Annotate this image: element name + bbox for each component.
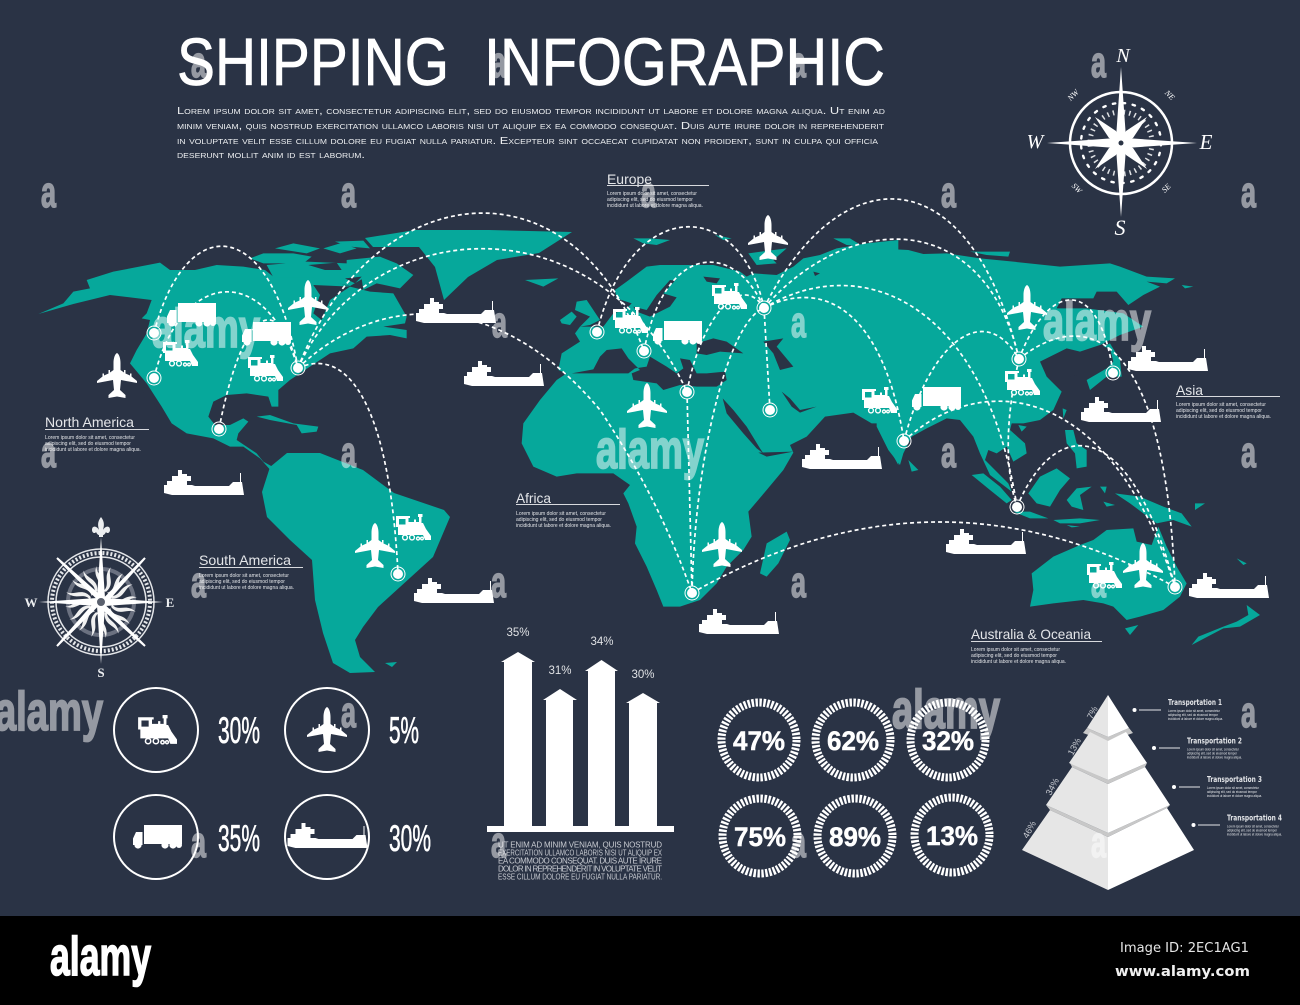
dial: 89%: 89% [829, 822, 881, 852]
compass: rose bottom left: S [97, 665, 105, 680]
watermarks: a [1241, 428, 1256, 477]
title: INFOGRAPHIC [484, 25, 885, 100]
label: Asia [1176, 382, 1280, 420]
label: South America: Lorem ipsum dolor sit amet, consectetur [199, 573, 289, 579]
bar chart: arrows: 35% [506, 627, 530, 639]
compass: top right [1027, 45, 1213, 240]
footer band [0, 916, 1300, 1005]
watermarks: a [791, 38, 806, 87]
pyramid legend: Transportation 1: incididunt ut labore et dolore magna aliqua. [1168, 717, 1223, 721]
pyramid legend: Transportation 3: Transportation 3 [1207, 775, 1262, 784]
watermarks: a [791, 818, 806, 867]
watermarks: alamy [596, 418, 704, 480]
bar chart caption: EA COMMODO CONSEQUAT. DUIS AUTE IRURE [498, 856, 662, 866]
label: Europe: Lorem ipsum dolor sit amet, consectetur [607, 191, 697, 197]
icons: trucks [167, 303, 961, 411]
compass: top right: SW [1070, 181, 1085, 196]
pyramid legend: Transportation 4: incididunt ut labore et dolore magna aliqua. [1227, 832, 1282, 836]
pyramid chart: 34% [1044, 776, 1061, 797]
label: Africa: Lorem ipsum dolor sit amet, consectetur [516, 511, 606, 517]
stat: train share: 30% [218, 710, 260, 751]
label: Europe: adipiscing elit, sed do eiusmod tempor [607, 197, 693, 203]
label: Australia and Oceania: incididunt ut labore et dolore magna aliqua. [971, 659, 1066, 665]
compass: top right: NE [1162, 88, 1177, 102]
intro paragraph: Lorem ipsum dolor sit amet, consectetur adipiscing elit, sed do eiusmod tempor incididunt ut labore et dolore magna aliqua. Ut enim ad [177, 105, 885, 117]
label: Asia: adipiscing elit, sed do eiusmod tempor [1176, 408, 1262, 414]
label: North America: Lorem ipsum dolor sit amet, consectetur [45, 435, 135, 441]
watermarks: a [341, 688, 356, 737]
intro paragraph: minim veniam, quis nostrud exercitation ullamco laboris nisi ut aliquip ex ea commodo consequat. Duis aute irure dolor in reprehenderit [177, 120, 885, 132]
label: Australia and Oceania [971, 626, 1102, 665]
pyramid legend: Transportation 2: Transportation 2 [1187, 736, 1242, 746]
watermarks: a [341, 168, 356, 217]
label: North America: adipiscing elit, sed do eiusmod tempor [45, 441, 131, 447]
watermarks: a [1091, 818, 1106, 867]
watermarks: a [491, 818, 506, 867]
icons: ships [164, 298, 1269, 634]
pyramid legend: Transportation 4 [1192, 814, 1282, 836]
icons: planes [97, 215, 1163, 588]
dial: 32%: 32% [922, 726, 974, 756]
bar chart caption: ESSE CILLUM DOLORE EU FUGIAT NULLA PARIATUR. [498, 872, 662, 882]
watermarks: alamy [152, 297, 260, 359]
bar chart caption [498, 840, 663, 882]
route hubs [147, 301, 1182, 600]
pyramid legend: Transportation 1 [1132, 698, 1223, 721]
bar chart: arrows [487, 627, 674, 832]
shipping routes [154, 199, 1175, 593]
compass: top right: E [1199, 130, 1213, 154]
dial: 75% [722, 798, 798, 874]
pyramid legend: Transportation 3: adipiscing elit, sed do eiusmod tempor [1207, 790, 1258, 794]
label: South America: adipiscing elit, sed do eiusmod tempor [199, 579, 285, 585]
pyramid legend: Transportation 3: incididunt ut labore et dolore magna aliqua. [1207, 794, 1262, 798]
compass: rose bottom left: W [24, 595, 38, 610]
label: Africa: adipiscing elit, sed do eiusmod tempor [516, 517, 602, 523]
watermarks: a [491, 38, 506, 87]
label: Australia and Oceania: adipiscing elit, sed do eiusmod tempor [971, 653, 1057, 659]
bar chart: arrows: 30% [631, 669, 655, 681]
label: North America [45, 414, 149, 453]
pyramid legend: Transportation 2: incididunt ut labore et dolore magna aliqua. [1187, 756, 1242, 760]
title: SHIPPING [177, 25, 449, 100]
pyramid legend: Transportation 4: Lorem ipsum dolor sit amet, consectetur [1227, 824, 1280, 828]
compass: top right: SE [1160, 182, 1173, 195]
icon: fleur-de-lis [92, 517, 110, 537]
watermarks: a [191, 818, 206, 867]
label: Australia and Oceania: Australia & Oceania [971, 626, 1091, 642]
dial: 75%: 75% [734, 822, 786, 852]
compass: top right: NW [1065, 87, 1082, 103]
watermarks: alamy [1043, 290, 1151, 352]
watermarks: a [941, 168, 956, 217]
stat: truck share: 35% [218, 818, 260, 859]
compass: rose bottom left: E [166, 595, 174, 610]
label: North America: incididunt ut labore et dolore magna aliqua. [45, 447, 141, 453]
stat: ship share: 30% [389, 818, 431, 859]
label: Asia: Asia [1176, 382, 1203, 398]
footer logo: alamy [50, 925, 151, 987]
stat: plane share [285, 688, 419, 772]
icons: trains [163, 283, 1122, 588]
North America [38, 241, 413, 473]
watermarks: a [341, 428, 356, 477]
dial: 47%: 47% [733, 726, 785, 756]
Europe, Africa and West Asia [522, 235, 898, 607]
world map [38, 230, 1260, 673]
watermarks: a [941, 428, 956, 477]
pyramid legend: Transportation 3 [1172, 775, 1262, 798]
watermarks: alamy [892, 678, 1000, 740]
intro paragraph: deserunt mollit anim id est laborum. [177, 149, 365, 161]
intro paragraph: in voluptate velit esse cillum dolore eu fugiat nulla pariatur. Excepteur sint occaecat cupidatat non proident, sunt in culpa qui officia [177, 135, 878, 147]
intro paragraph [177, 105, 885, 161]
pyramid legend: Transportation 2 [1152, 736, 1242, 760]
dial: 13% [914, 798, 990, 872]
label: Africa: incididunt ut labore et dolore magna aliqua. [516, 523, 611, 529]
Falkland islands [385, 662, 397, 667]
watermarks: a [191, 558, 206, 607]
pyramid legend: Transportation 2: Lorem ipsum dolor sit amet, consectetur [1187, 748, 1240, 752]
watermarks [0, 38, 1256, 867]
pyramid legend: Transportation 2: adipiscing elit, sed do eiusmod tempor [1187, 752, 1238, 756]
pyramid legend: Transportation 4: adipiscing elit, sed do eiusmod tempor [1227, 828, 1278, 832]
label: Australia and Oceania: Lorem ipsum dolor sit amet, consectetur [971, 647, 1060, 653]
pyramid chart [1021, 695, 1194, 890]
compass: top right: W [1027, 131, 1046, 153]
label: South America [199, 552, 303, 591]
stat: truck share [114, 795, 260, 879]
label: Africa [516, 490, 620, 529]
pyramid chart: 13% [1066, 736, 1083, 757]
stat: ship share [285, 795, 431, 879]
South America [262, 453, 450, 673]
stat: plane share: 5% [389, 710, 419, 751]
pyramid legend: Transportation 1: adipiscing elit, sed do eiusmod tempor [1168, 713, 1219, 717]
watermarks: a [41, 168, 56, 217]
footer image id: Image ID: 2EC1AG1 [1120, 941, 1249, 956]
pyramid chart: 7% [1085, 704, 1100, 721]
map transport icons [97, 215, 1269, 634]
Greenland [365, 230, 572, 300]
dial: 89% [818, 798, 892, 874]
watermarks: a [492, 298, 507, 347]
compass: rose bottom left [24, 517, 174, 680]
watermarks: a [41, 428, 56, 477]
title [177, 25, 885, 100]
compass: top right: N [1115, 45, 1131, 67]
label: South America: incididunt ut labore et dolore magna aliqua. [199, 585, 294, 591]
compass: top right: S [1114, 215, 1126, 240]
label: Europe [607, 171, 709, 209]
New Zealand [1192, 605, 1260, 645]
dial: 13%: 13% [926, 821, 978, 851]
dial: 62%: 62% [827, 726, 879, 756]
label: Asia: incididunt ut labore et dolore magna aliqua. [1176, 414, 1271, 420]
pyramid legend: Transportation 4: Transportation 4 [1227, 814, 1282, 822]
dial: 62% [816, 702, 890, 778]
bar chart: arrows: 34% [590, 636, 614, 648]
watermarks: a [791, 558, 806, 607]
bar chart caption: EXERCITATION ULLAMCO LABORIS NISI UT ALIQUIP EX [498, 848, 663, 858]
label: Asia: Lorem ipsum dolor sit amet, consectetur [1176, 402, 1266, 408]
label: Europe: Europe [607, 171, 652, 187]
label: Africa: Africa [516, 490, 551, 506]
pyramid chart: 46% [1021, 819, 1038, 840]
watermarks: a [1091, 558, 1106, 607]
dial: 32% [910, 702, 986, 778]
label: Europe: incididunt ut labore et dolore magna aliqua. [607, 203, 703, 209]
pyramid legend: Transportation 1: Transportation 1 [1168, 698, 1222, 707]
dial: 47% [722, 702, 796, 778]
watermarks: a [491, 558, 506, 607]
label: North America: North America [45, 414, 134, 430]
stat: train share [114, 688, 260, 772]
East Asia, Indonesia and Australia [877, 248, 1247, 635]
bar chart caption: UT ENIM AD MINIM VENIAM, QUIS NOSTRUD [498, 840, 662, 850]
watermarks: a [191, 38, 206, 87]
bar chart: arrows: 31% [548, 665, 572, 677]
watermarks: a [1241, 168, 1256, 217]
pyramid legend: Transportation 3: Lorem ipsum dolor sit amet, consectetur [1207, 786, 1260, 790]
watermarks: a [1091, 38, 1106, 87]
watermarks: a [641, 168, 656, 217]
watermarks: a [791, 298, 806, 347]
watermarks: a [1241, 688, 1256, 737]
bar chart caption: DOLOR IN REPREHENDERIT IN VOLUPTATE VELIT [498, 864, 662, 874]
label: South America: South America [199, 552, 291, 568]
footer url: www.alamy.com [1115, 964, 1250, 980]
pyramid legend: Transportation 1: Lorem ipsum dolor sit amet, consectetur [1168, 709, 1221, 713]
